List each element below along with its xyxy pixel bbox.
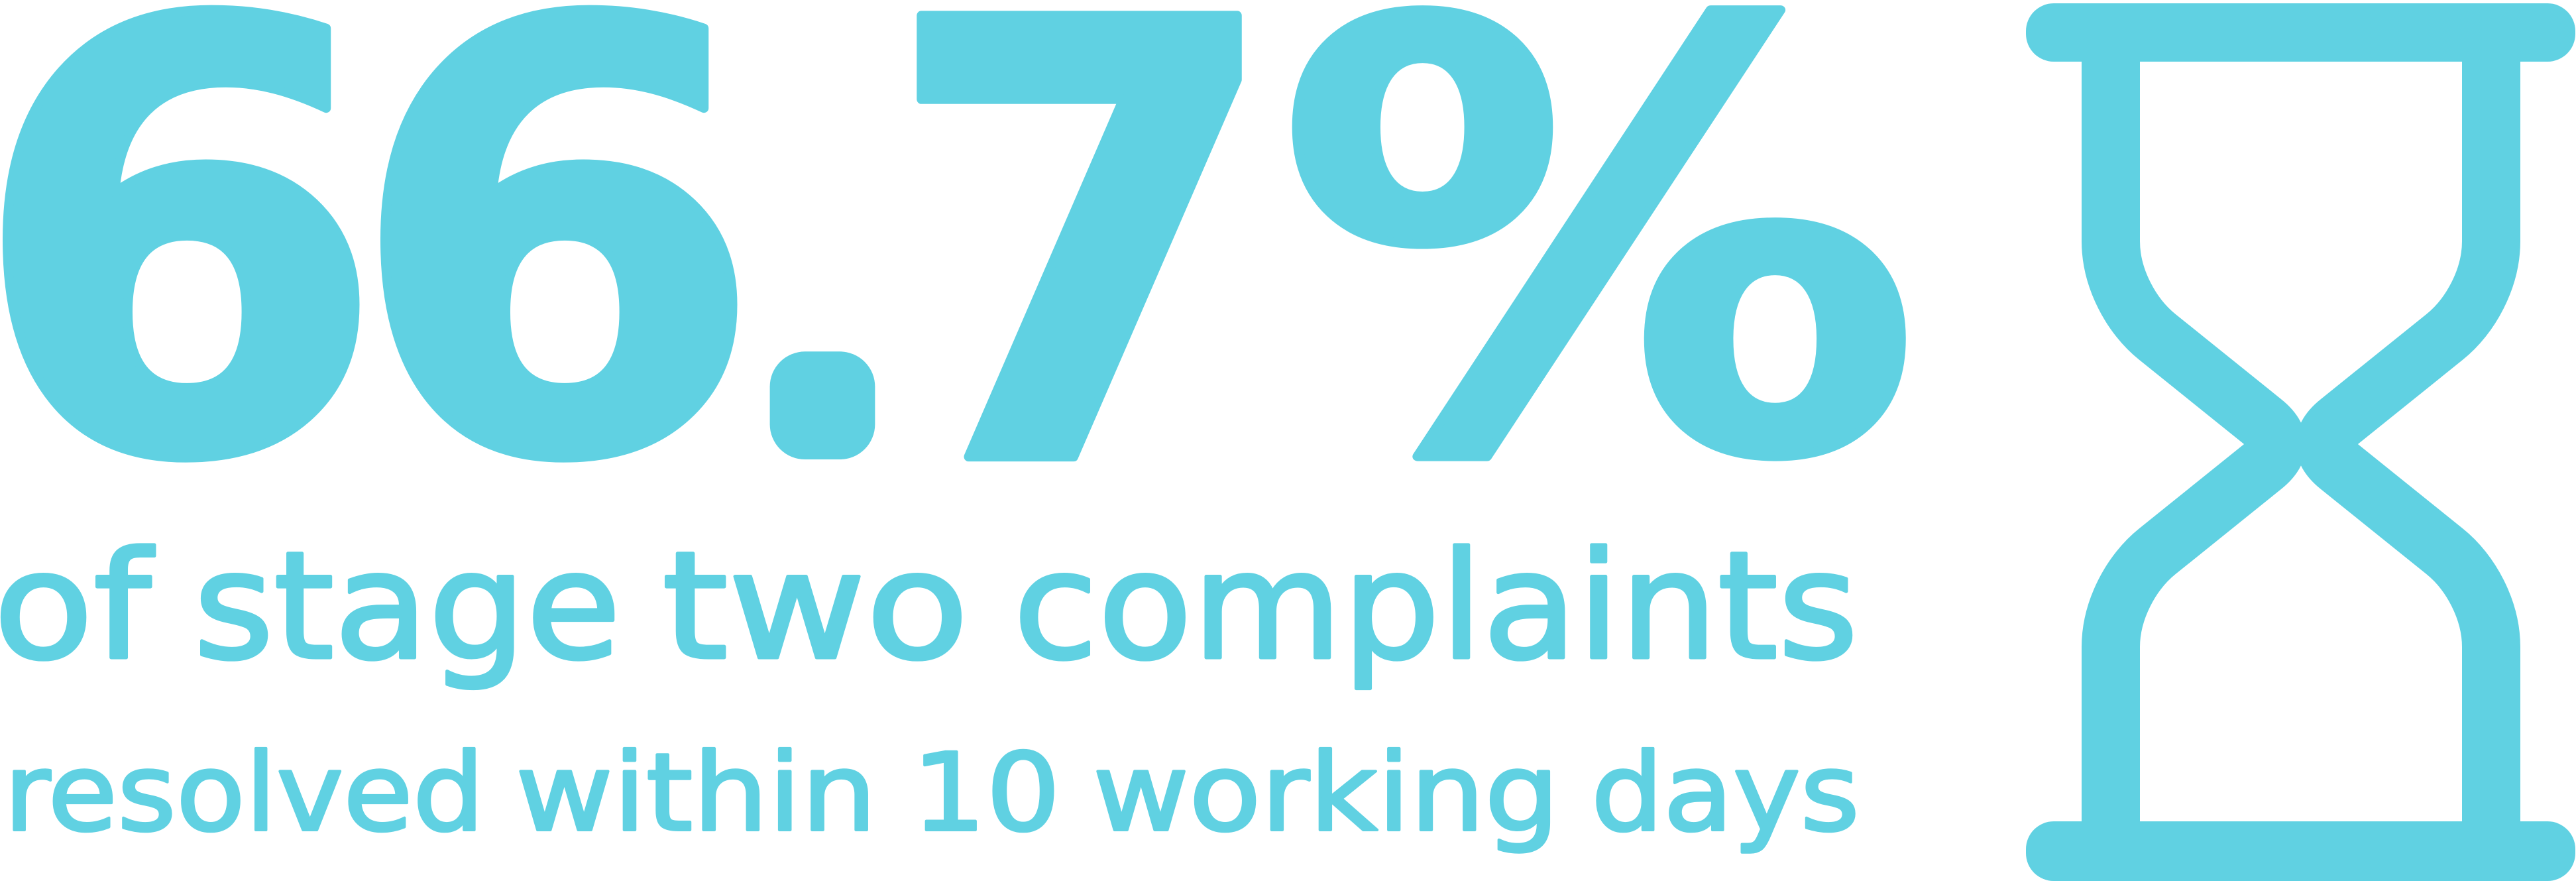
subheading: of stage two complaints: two bbox=[662, 520, 969, 693]
supporting text: resolved within 10 working days: resolved bbox=[4, 731, 484, 856]
subheading: of stage two complaints: stage bbox=[194, 520, 621, 693]
supporting text: resolved within 10 working days: within bbox=[516, 731, 877, 856]
supporting text: resolved within 10 working days: days bbox=[1591, 731, 1860, 856]
headline statistic: 66.7%: . bbox=[785, 240, 860, 471]
supporting text: resolved within 10 working days: working bbox=[1093, 731, 1559, 856]
supporting text: resolved within 10 working days bbox=[4, 731, 1860, 856]
subheading: of stage two complaints bbox=[0, 520, 1858, 693]
supporting text: resolved within 10 working days: 10 bbox=[912, 731, 1060, 856]
subheading: of stage two complaints: complaints bbox=[1013, 520, 1858, 693]
icon: hourglass bbox=[2026, 3, 2575, 881]
headline statistic: 66.7% bbox=[0, 0, 1921, 600]
